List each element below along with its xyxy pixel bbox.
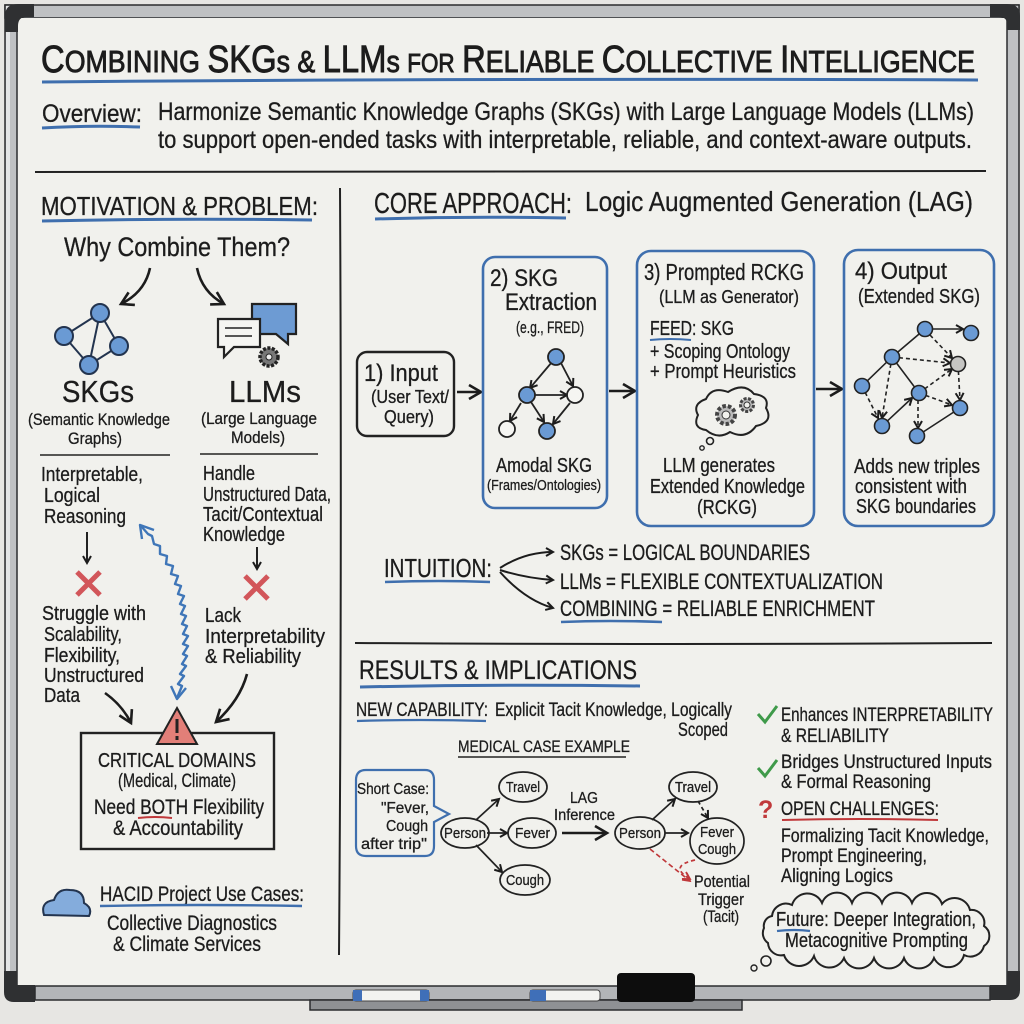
SKGs column: SKGs bbox=[62, 374, 134, 409]
step 3: prompted RCKG: (RCKG) bbox=[697, 497, 757, 519]
LLMs column: & Reliability bbox=[205, 646, 301, 668]
step 3: prompted RCKG: FEED: SKG bbox=[650, 318, 734, 340]
step 4: output: 4) Output bbox=[855, 258, 947, 285]
SKGs column: Flexibility, bbox=[44, 645, 120, 667]
SKGs column: Interpretable, bbox=[41, 464, 143, 486]
LLMs column: Interpretability bbox=[205, 626, 325, 648]
graph after inference: Travel bbox=[675, 779, 711, 796]
step 3: prompted RCKG: + Scoping Ontology bbox=[650, 341, 790, 363]
HACID use cases: & Climate Services bbox=[113, 933, 261, 956]
panel: critical domains: & Accountability bbox=[113, 817, 243, 840]
heading: core approach: Logic Augmented Generation (LAG) bbox=[585, 186, 973, 217]
graph after inference: Trigger bbox=[698, 890, 744, 909]
arrows to SKGs and LLMs bbox=[121, 268, 224, 304]
intuition: INTUITION: bbox=[384, 553, 492, 583]
dividers bbox=[35, 171, 992, 955]
graph after inference bbox=[615, 772, 750, 926]
benefits and challenges: Formalizing Tacit Knowledge, bbox=[781, 826, 989, 847]
icon: cloud bbox=[43, 890, 90, 916]
panel: critical domains: Need BOTH Flexibility bbox=[94, 796, 264, 819]
LLMs column: LLMs bbox=[229, 374, 301, 409]
benefits and challenges: & Formal Reasoning bbox=[781, 772, 931, 793]
LLMs column: Knowledge bbox=[203, 524, 285, 546]
question: Why Combine Them? bbox=[64, 232, 290, 262]
arrows to critical domains bbox=[105, 674, 247, 723]
LAG inference arrow: LAG bbox=[570, 790, 598, 807]
short case bubble bbox=[356, 770, 449, 856]
step 3: prompted RCKG: LLM generates bbox=[663, 455, 775, 477]
SKGs column: Unstructured bbox=[44, 665, 144, 687]
short case bubble: after trip" bbox=[361, 836, 427, 853]
icon: SKG graph bbox=[55, 304, 128, 374]
check 1 bbox=[758, 706, 777, 722]
step 4: output: (Extended SKG) bbox=[858, 286, 980, 308]
short case bubble: Short Case: bbox=[357, 781, 429, 798]
step 4: output bbox=[844, 250, 994, 526]
arrow 2 bbox=[609, 390, 635, 392]
step 2: SKG extraction: Extraction bbox=[505, 289, 597, 316]
graph before inference: Fever bbox=[515, 825, 550, 842]
LLMs column bbox=[200, 374, 331, 668]
step 1: input: (User Text/ bbox=[371, 387, 449, 407]
benefits and challenges: OPEN CHALLENGES: bbox=[781, 799, 939, 820]
marker tray bbox=[35, 973, 990, 1010]
graph before inference bbox=[441, 772, 556, 895]
step 1: input: Query) bbox=[384, 407, 434, 427]
LAG inference arrow: Inference bbox=[554, 807, 615, 824]
future cloud: Future: Deeper Integration, bbox=[776, 909, 976, 931]
future cloud: Metacognitive Prompting bbox=[785, 930, 968, 952]
SKGs column: (Semantic Knowledge bbox=[28, 410, 170, 429]
SKGs column: Struggle with bbox=[42, 603, 146, 625]
overview bbox=[42, 98, 974, 154]
HACID use cases: Collective Diagnostics bbox=[107, 912, 277, 935]
step 3: prompted RCKG: Extended Knowledge bbox=[650, 476, 805, 498]
branching arrows bbox=[500, 552, 553, 608]
SKGs column: Scalability, bbox=[44, 624, 122, 646]
LLMs column: (Large Language bbox=[201, 409, 317, 428]
SKGs column: Data bbox=[44, 685, 81, 707]
heading: motivation: MOTIVATION & PROBLEM: bbox=[41, 191, 318, 221]
short case bubble: Cough bbox=[386, 818, 428, 835]
LLMs column: Lack bbox=[205, 605, 242, 627]
arrow 3 bbox=[816, 388, 842, 390]
intuition: SKGs = LOGICAL BOUNDARIES bbox=[560, 540, 810, 565]
graph after inference: Fever bbox=[700, 824, 734, 841]
graph before inference: Person bbox=[444, 825, 486, 842]
intuition: COMBINING = RELIABLE ENRICHMENT bbox=[560, 596, 875, 621]
overview: Overview: bbox=[42, 100, 142, 128]
icon: warning bbox=[157, 708, 197, 744]
LLMs column: Tacit/Contextual bbox=[203, 504, 323, 526]
step 1: input bbox=[357, 352, 454, 436]
new capability: Scoped bbox=[678, 720, 728, 741]
step 4: output: Adds new triples bbox=[854, 456, 980, 478]
step 3: prompted RCKG: 3) Prompted RCKG bbox=[644, 259, 804, 285]
HACID use cases: HACID Project Use Cases: bbox=[100, 883, 304, 906]
graph before inference: Travel bbox=[506, 779, 540, 796]
heading: core approach: CORE APPROACH: bbox=[374, 188, 572, 220]
panel: motivation and problem bbox=[28, 191, 331, 956]
panel: critical domains: CRITICAL DOMAINS bbox=[98, 750, 256, 772]
arrow 1 bbox=[457, 391, 481, 393]
LLMs column: Models) bbox=[231, 428, 285, 447]
SKGs column bbox=[28, 374, 170, 707]
benefits and challenges: Prompt Engineering, bbox=[781, 846, 927, 867]
panel: results and implications bbox=[356, 655, 993, 971]
mini graph bbox=[499, 349, 583, 439]
benefits and challenges bbox=[758, 705, 993, 887]
step 2: SKG extraction: 2) SKG bbox=[490, 265, 558, 292]
title: COMBINING SKGs & LLMs FOR RELIABLE COLLECTIVE INTELLIGENCE bbox=[41, 39, 975, 81]
step 3: prompted RCKG bbox=[637, 251, 814, 526]
future cloud bbox=[751, 893, 989, 971]
question mark: ? bbox=[758, 796, 773, 824]
benefits and challenges: Bridges Unstructured Inputs bbox=[781, 752, 992, 773]
graph before inference: Cough bbox=[506, 872, 544, 889]
short case bubble: "Fever, bbox=[381, 800, 429, 817]
new capability: NEW CAPABILITY: bbox=[356, 700, 488, 721]
extended graph bbox=[854, 322, 978, 444]
panel: critical domains: (Medical, Climate) bbox=[118, 771, 236, 792]
graph after inference: (Tacit) bbox=[703, 907, 739, 926]
check 2 bbox=[758, 760, 777, 776]
medical case label: MEDICAL CASE EXAMPLE bbox=[458, 737, 630, 756]
heading: results: RESULTS & IMPLICATIONS bbox=[359, 655, 637, 685]
step 1: input: 1) Input bbox=[364, 360, 438, 387]
graph after inference: Person bbox=[619, 825, 661, 842]
step 2: SKG extraction: (Frames/Ontologies) bbox=[487, 477, 601, 494]
step 3: prompted RCKG: + Prompt Heuristics bbox=[650, 361, 796, 383]
LLMs column: Handle bbox=[203, 463, 255, 485]
benefits and challenges: & RELIABILITY bbox=[781, 726, 889, 747]
step 3: prompted RCKG: (LLM as Generator) bbox=[659, 287, 799, 307]
panel: critical domains bbox=[81, 708, 274, 849]
LLMs column: Unstructured Data, bbox=[203, 484, 331, 506]
heading: core approach bbox=[374, 186, 973, 220]
intuition bbox=[384, 540, 883, 622]
graph after inference: Cough bbox=[698, 841, 736, 858]
SKGs column: Graphs) bbox=[68, 429, 122, 448]
step 4: output: consistent with bbox=[855, 476, 967, 498]
icon: LLM chat bbox=[218, 304, 296, 366]
new capability bbox=[356, 700, 732, 741]
step 4: output: SKG boundaries bbox=[856, 496, 976, 518]
graph after inference: Potential bbox=[694, 872, 750, 891]
new capability: Explicit Tacit Knowledge, Logically bbox=[495, 700, 732, 721]
intuition: LLMs = FLEXIBLE CONTEXTUALIZATION bbox=[560, 569, 883, 594]
benefits and challenges: Aligning Logics bbox=[781, 866, 893, 887]
SKGs column: Reasoning bbox=[44, 506, 126, 528]
step 2: SKG extraction bbox=[483, 257, 607, 508]
icon: thought cloud with gears bbox=[696, 387, 768, 450]
step 2: SKG extraction: (e.g., FRED) bbox=[516, 318, 584, 337]
LAG inference arrow bbox=[554, 790, 615, 833]
step 2: SKG extraction: Amodal SKG bbox=[496, 455, 592, 477]
wavy blue arrow bbox=[140, 525, 188, 699]
HACID use cases bbox=[100, 883, 304, 956]
SKGs column: Logical bbox=[44, 485, 100, 507]
